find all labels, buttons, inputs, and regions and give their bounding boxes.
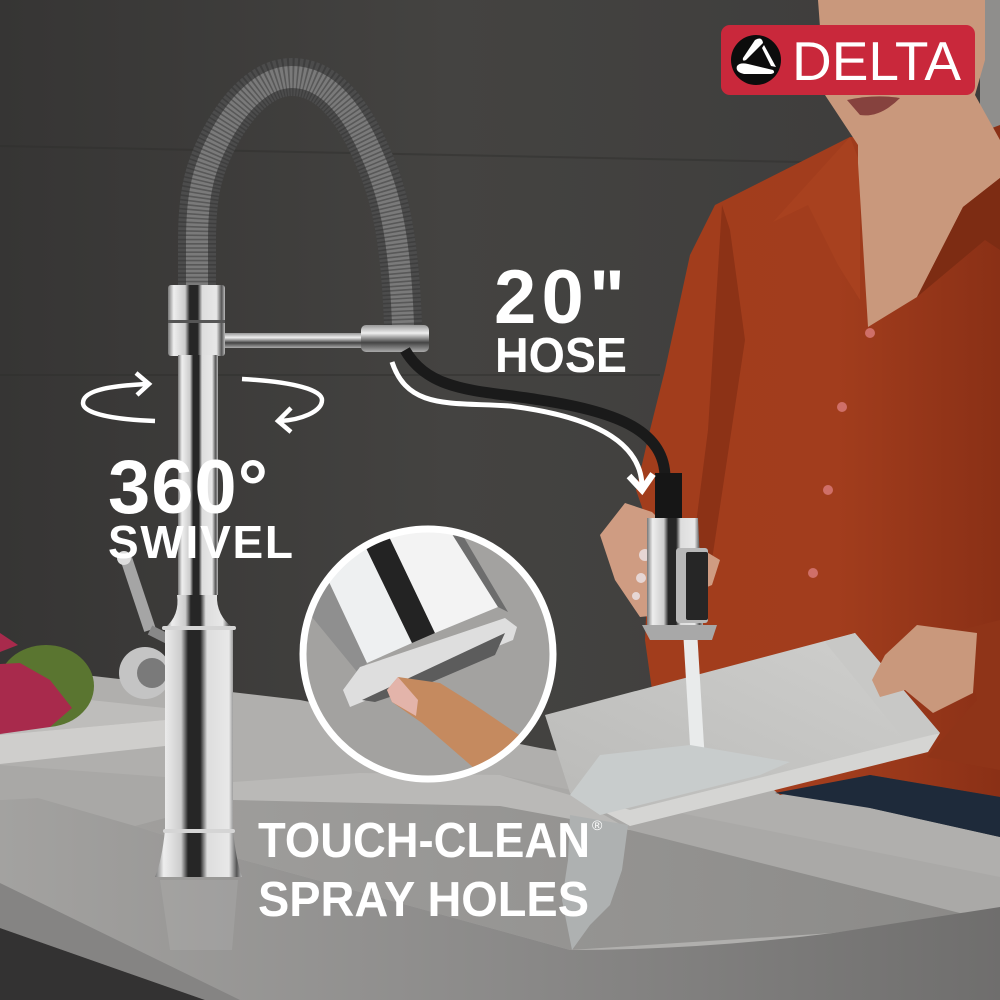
Delta logo badge — [721, 25, 975, 95]
right sink rim band — [500, 775, 1000, 913]
water — [562, 630, 790, 950]
faucet — [117, 77, 717, 877]
fingernail — [387, 677, 418, 716]
basin interior — [135, 800, 1000, 950]
Delta logo badge: DELTA — [792, 30, 961, 92]
base rings — [162, 626, 236, 833]
spray head — [642, 473, 717, 640]
text: 360 swivel: SWIVEL — [108, 516, 293, 568]
text: touch-clean spray holes — [258, 814, 603, 927]
side handle — [117, 551, 171, 699]
text: 20 inch hose: 20" — [494, 255, 625, 340]
right collar — [917, 178, 1000, 297]
coiled spring spout — [197, 77, 403, 325]
lips — [847, 96, 900, 115]
arrowhead: hose — [629, 474, 653, 490]
background behind hair — [980, 0, 1000, 135]
white arrow: hose length — [392, 362, 642, 485]
tile joints — [0, 146, 1000, 375]
left collar — [773, 137, 860, 300]
text: touch-clean spray holes: ® — [592, 817, 603, 833]
woman — [636, 0, 1000, 837]
nozzle close-up — [312, 532, 517, 707]
right hand — [872, 620, 1000, 770]
dish — [545, 633, 940, 826]
buttons — [808, 328, 875, 578]
text: touch-clean spray holes: TOUCH-CLEAN — [258, 814, 590, 868]
finger — [387, 677, 519, 767]
left counter deck — [0, 765, 233, 860]
text: 20 inch hose — [494, 255, 627, 383]
flared base — [165, 595, 233, 628]
left hand — [600, 503, 720, 617]
text: 360 swivel — [108, 445, 293, 568]
sink and counter front — [0, 765, 1000, 1000]
front edge and cabinet — [0, 883, 240, 1000]
black hose — [405, 350, 665, 478]
wall background — [0, 0, 1000, 800]
swivel arrow icon — [83, 373, 322, 432]
shirt — [636, 125, 1000, 797]
counter top — [0, 676, 1000, 1000]
inset circle: touch-clean spray holes — [300, 526, 556, 782]
front counter — [0, 798, 1000, 1000]
text: 20 inch hose: HOSE — [495, 329, 627, 383]
horizontal arm — [225, 333, 365, 348]
neck and face — [818, 0, 1000, 327]
main stem — [178, 355, 218, 595]
text: 360 swivel: 360° — [108, 445, 268, 530]
dragon fruit and plate — [0, 633, 165, 764]
text: touch-clean spray holes: SPRAY HOLES — [258, 873, 589, 927]
logo icon — [731, 35, 781, 85]
spout connector — [361, 325, 429, 352]
sleeve shading — [692, 205, 745, 560]
upper collar — [168, 285, 225, 356]
faucet reflection — [160, 880, 238, 950]
jeans — [775, 775, 1000, 837]
back rim highlight — [233, 773, 630, 830]
